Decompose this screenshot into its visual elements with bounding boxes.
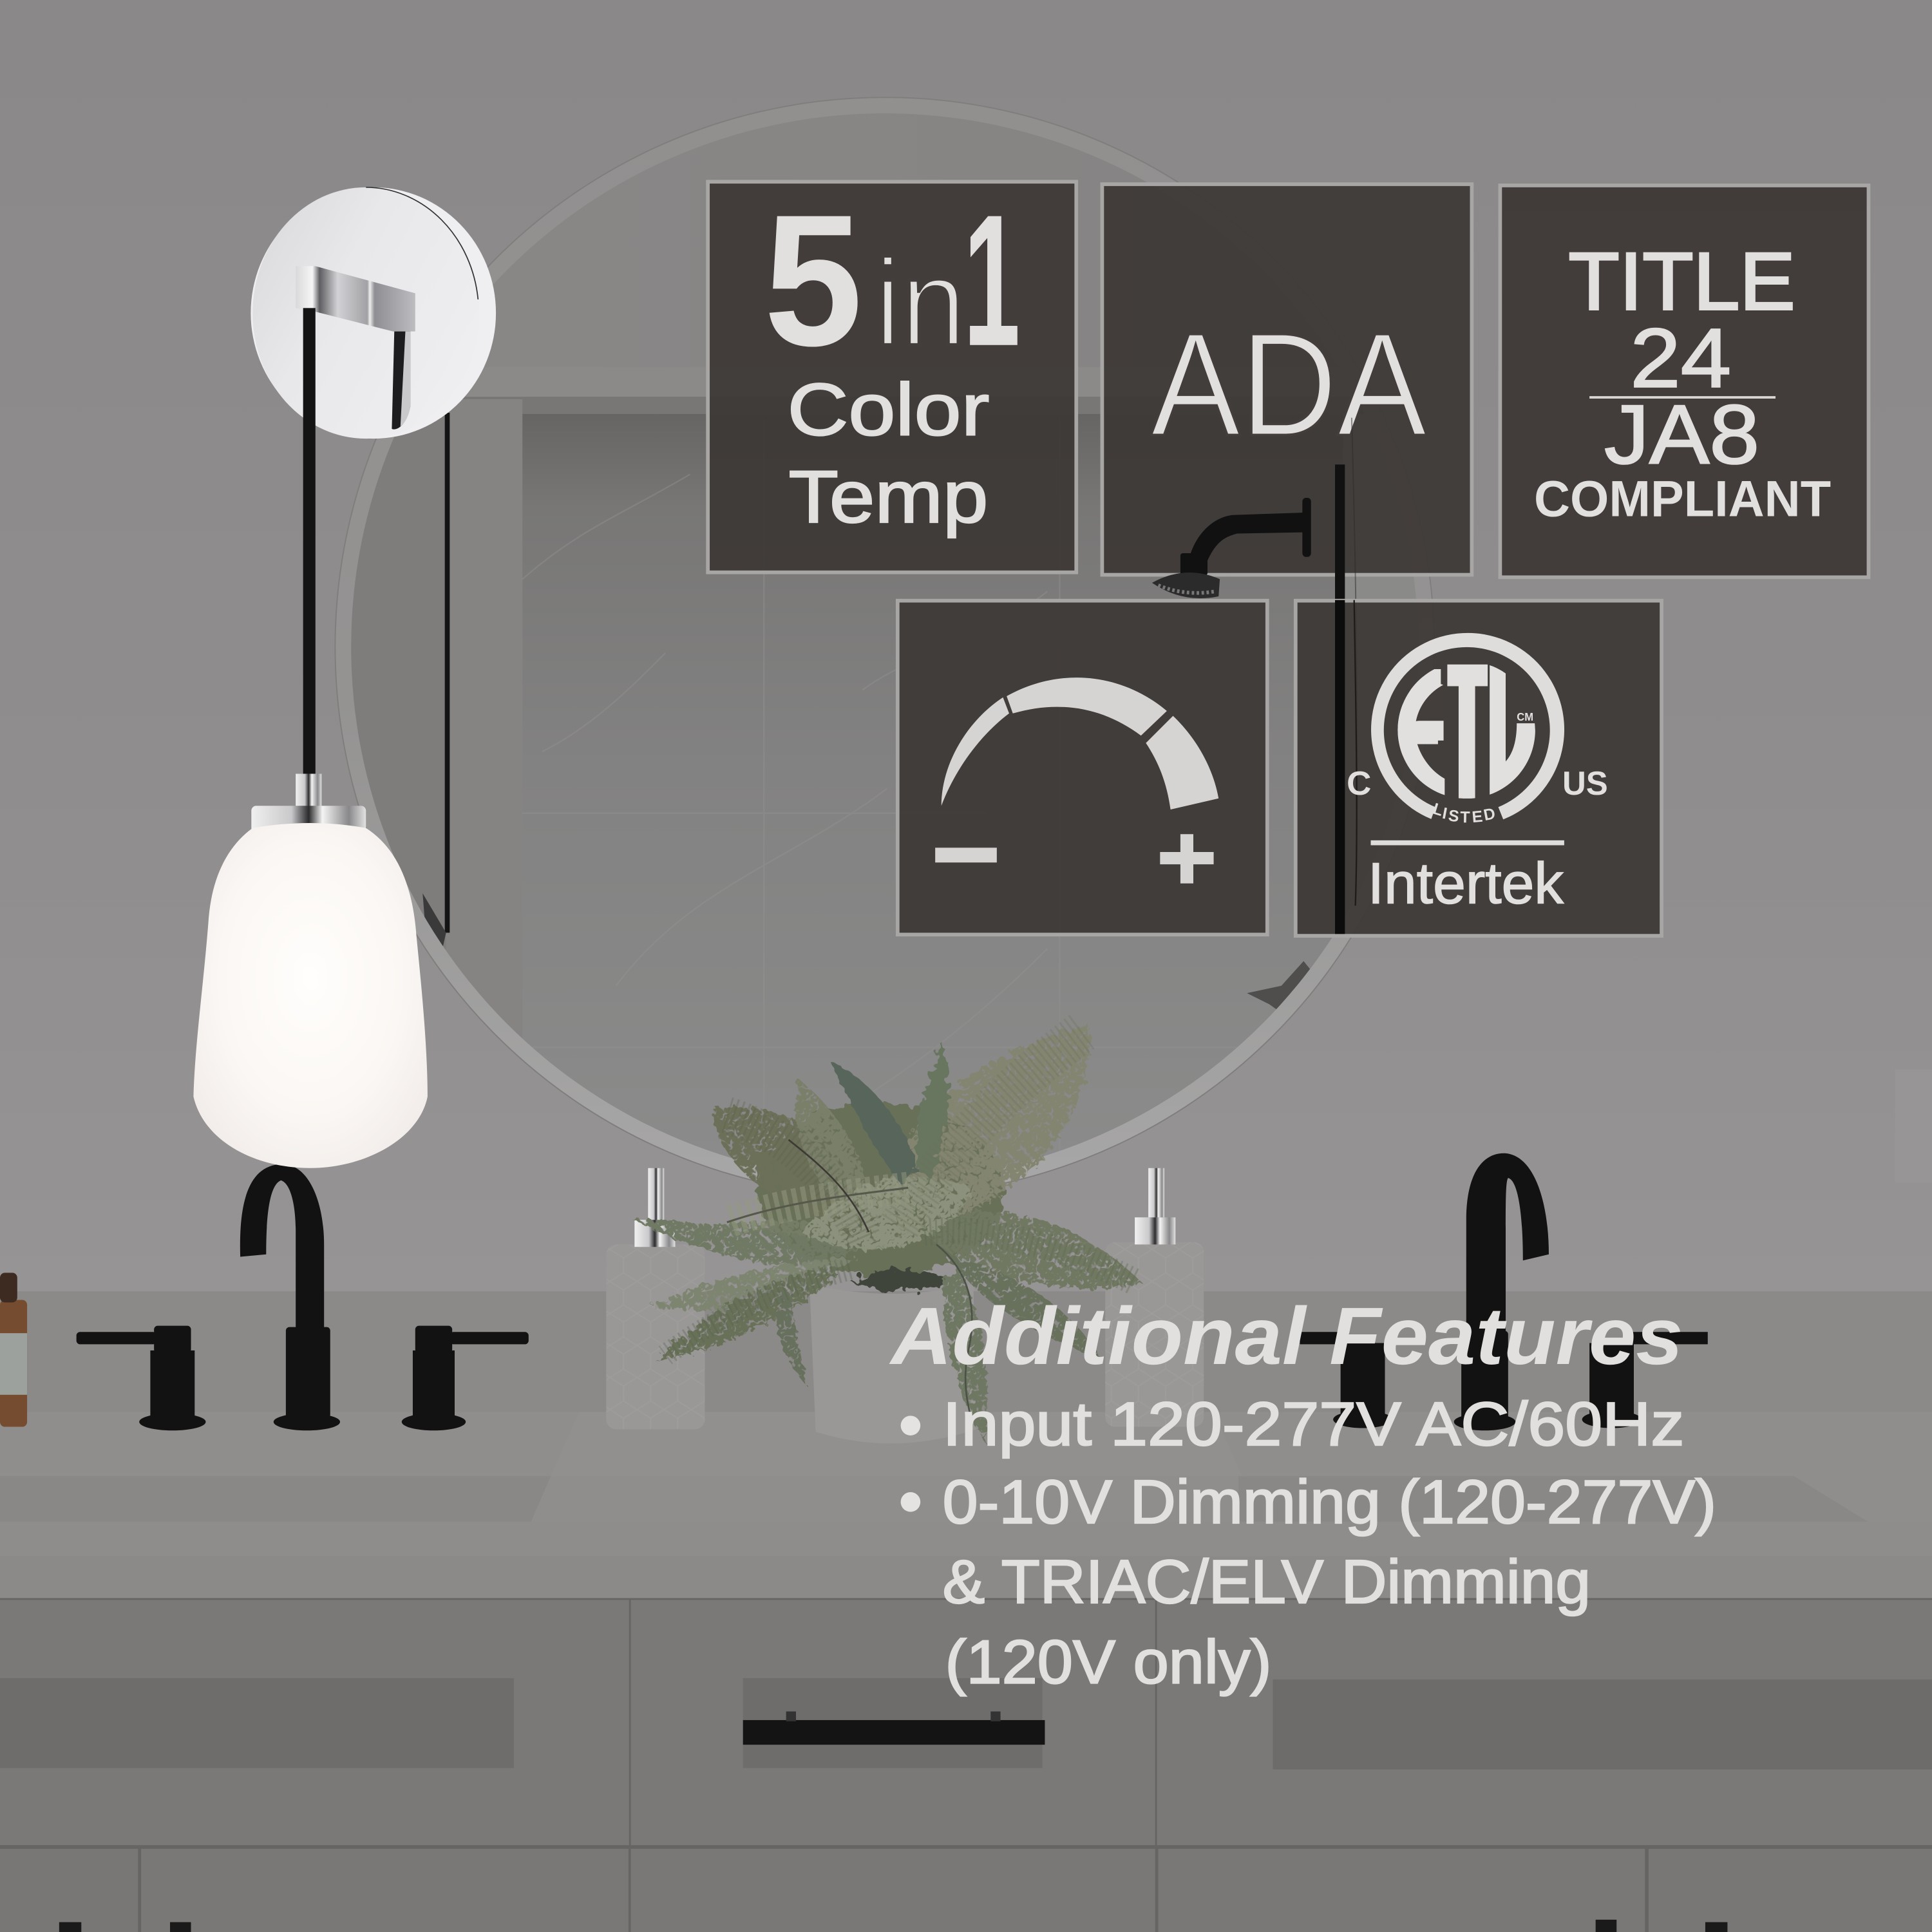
vanity cabinets	[0, 1598, 1932, 1932]
ETL logo: I	[1441, 804, 1449, 823]
sconce bracket	[296, 266, 415, 332]
ETL logo	[1371, 622, 1564, 840]
ETL logo: L	[1430, 800, 1445, 820]
soap bottle: left	[606, 1168, 705, 1429]
additional features list: 0-10V Dimming (120-277V)	[943, 1468, 1716, 1537]
faucet handle right	[402, 1326, 529, 1430]
additional features heading: Additional Features	[889, 1291, 1683, 1381]
soap bottle: right	[1105, 1168, 1204, 1427]
icon: minus	[935, 848, 997, 862]
icon: dimmer arc	[942, 677, 1218, 810]
feature badge: 5 in 1 color temp	[708, 176, 1076, 573]
chrome ring	[251, 806, 366, 833]
feature badge: ETL listed: Intertek	[1368, 851, 1564, 916]
round mirror with reflection	[333, 97, 1454, 1208]
ETL logo: E	[1383, 629, 1446, 840]
sconce back plate	[251, 187, 496, 439]
wall sconce lamp	[193, 187, 496, 1168]
feature badge: ETL listed: US	[1562, 764, 1608, 802]
additional features list: & TRIAC/ELV Dimming	[943, 1548, 1591, 1616]
feature badge: Title 24 JA8 compliant: JA8	[1604, 387, 1759, 481]
feature badge: ADA: ADA	[1151, 303, 1427, 466]
feature badge: 5 in 1 color temp: Color	[788, 368, 989, 451]
left faucet	[77, 1164, 529, 1430]
feature badge: 5 in 1 color temp: in	[875, 234, 966, 372]
ETL logo: S	[1447, 806, 1460, 826]
feature badge: Title 24 JA8 compliant: TITLE	[1569, 236, 1795, 327]
feature badge: dimmable	[898, 601, 1267, 934]
faucet handle left	[77, 1326, 206, 1430]
shower reflection	[1152, 418, 1357, 933]
feature badge: 5 in 1 color temp: 5	[764, 176, 862, 385]
fabric cord	[303, 308, 316, 774]
feature badge: Title 24 JA8 compliant: COMPLIANT	[1534, 471, 1831, 527]
ETL logo: T	[1446, 623, 1488, 840]
opal glass shade	[193, 823, 428, 1168]
feature badge: ETL listed	[1296, 600, 1662, 936]
ETL logo: CM	[1517, 710, 1533, 723]
counter backsplash and countertop	[0, 1291, 1932, 1599]
drawer handle	[743, 1712, 1045, 1745]
additional features list: (120V only)	[945, 1628, 1271, 1697]
feature badge: ETL listed: C	[1347, 764, 1371, 802]
feature badge: Title 24 JA8 compliant	[1500, 185, 1868, 577]
ETL logo: D	[1482, 804, 1497, 824]
icon: plus	[1160, 834, 1214, 884]
feature badge: 5 in 1 color temp: 1	[963, 176, 1020, 385]
chrome collar	[296, 774, 321, 811]
bathroom wall background	[0, 0, 1932, 1306]
fern plant	[633, 1025, 1144, 1444]
additional features list: Input 120-277V AC/60Hz	[943, 1390, 1684, 1459]
amber jar	[0, 1273, 27, 1427]
ETL logo: E	[1471, 808, 1483, 826]
additional features list	[901, 1390, 1716, 1697]
feature badge: Title 24 JA8 compliant: 24	[1630, 311, 1731, 405]
ETL logo: T	[1460, 808, 1470, 826]
plant pot	[810, 1284, 976, 1443]
feature badge: ADA	[1102, 184, 1472, 575]
right faucet	[1300, 1153, 1708, 1430]
ETL logo: L	[1486, 622, 1535, 835]
feature badge: 5 in 1 color temp: Temp	[788, 456, 988, 538]
fern leaflet hatching	[665, 1030, 1133, 1417]
